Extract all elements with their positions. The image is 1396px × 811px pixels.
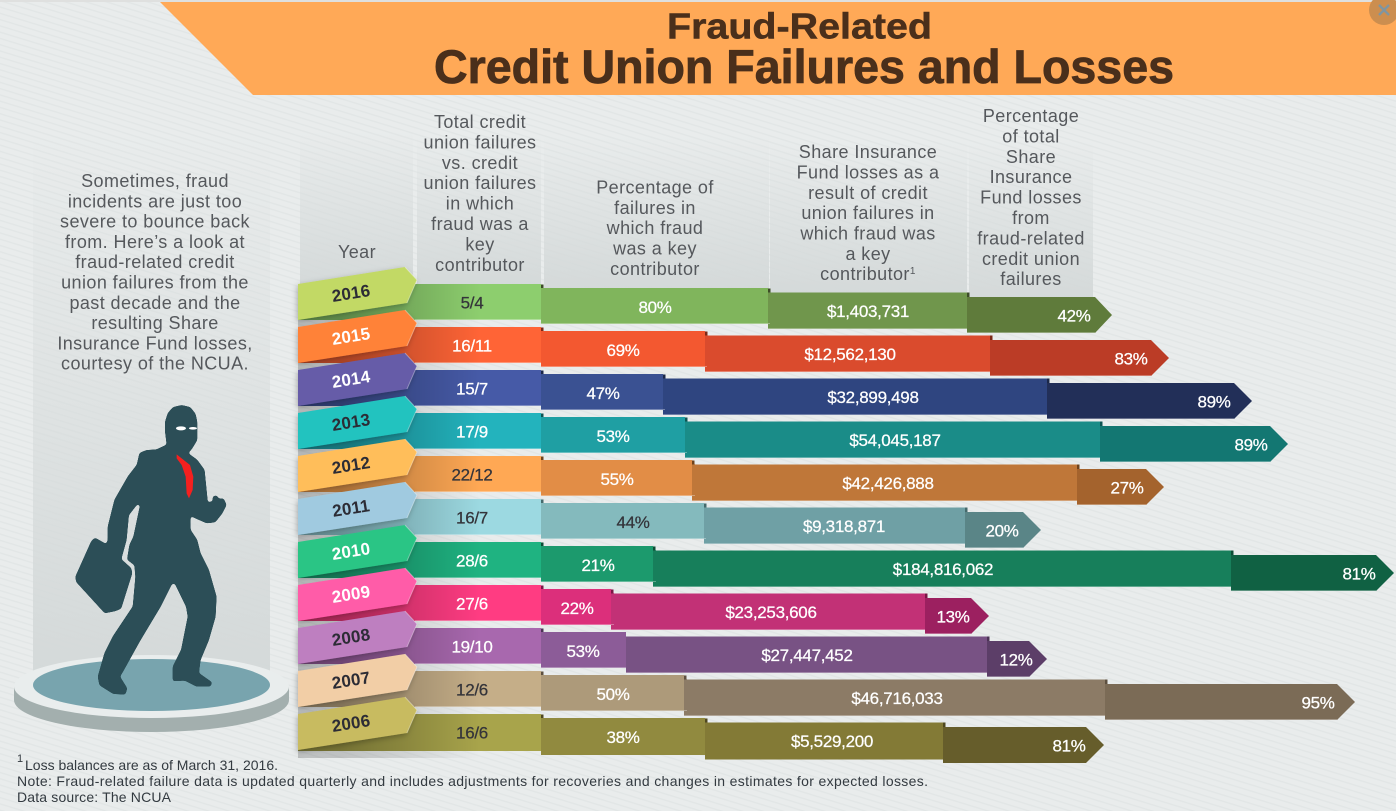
row values: 81% [1342, 564, 1376, 584]
row values: 80% [638, 298, 672, 317]
column heading: percentage of failures: which fraud [606, 218, 703, 238]
row values: $1,403,731 [827, 302, 909, 321]
row values: 89% [1197, 392, 1231, 412]
column heading: fund losses: which fraud was [799, 224, 936, 244]
row values [451, 638, 1033, 670]
column heading: total failures: Total credit [434, 112, 526, 132]
row values [456, 552, 1376, 584]
row values [456, 680, 1335, 712]
column heading: percentage of total losses: Share [1006, 147, 1056, 167]
column heading: fund losses [797, 142, 940, 284]
column heading: fund losses: result of credit [808, 183, 928, 203]
row values [452, 336, 1148, 368]
column heading: total failures: key [465, 234, 495, 254]
year tag [298, 353, 417, 406]
footnotes [17, 753, 928, 805]
column heading: fund losses: Fund losses as a [797, 162, 940, 182]
year tag [298, 611, 417, 664]
row: 2013 [298, 396, 1288, 462]
row values: 5/4 [461, 294, 483, 312]
panel: left column backdrop [33, 130, 270, 685]
row: 2015 [298, 310, 1169, 376]
column heading: fund losses: a key [845, 244, 891, 264]
row values: $5,529,200 [791, 732, 873, 751]
row values: $27,447,452 [761, 646, 853, 665]
intro text block: fraud-related credit [75, 252, 235, 272]
row values: 20% [985, 522, 1019, 540]
year tag: 2007 [331, 668, 372, 693]
row values: 81% [1052, 736, 1086, 756]
title line 1: Fraud-Related [667, 6, 932, 46]
row values: $32,899,498 [827, 388, 919, 407]
row values [456, 422, 1268, 454]
row values: 16/6 [456, 724, 488, 742]
column heading: percentage of total losses: failures [1000, 269, 1062, 289]
footnotes: 1 [17, 753, 23, 765]
row values [456, 594, 970, 626]
row values: 12% [999, 650, 1033, 670]
year tag [298, 396, 417, 449]
intro text block: past decade and the [69, 293, 241, 313]
year tag: 2016 [331, 281, 372, 306]
row values: 89% [1234, 436, 1268, 454]
row values: 83% [1114, 350, 1148, 368]
column heading: percentage of total losses: Percentage [983, 106, 1079, 126]
intro text block: resulting Share [91, 313, 219, 333]
intro text block: from. Here’s a look at [65, 232, 245, 252]
row values: 53% [566, 642, 600, 661]
row: 2009 [298, 568, 989, 634]
row: 2016 [298, 267, 1112, 333]
row: 2011 [298, 482, 1041, 548]
icon: masked fraudster with briefcase [76, 406, 226, 694]
year tag: 2013 [331, 410, 372, 435]
intro text block: Insurance Fund losses, [57, 333, 253, 353]
column heading: percentage of total losses: of total [1002, 126, 1060, 146]
row values: $184,816,062 [893, 560, 993, 579]
row values: 17/9 [456, 422, 488, 442]
intro text block: Sometimes, fraud [81, 171, 229, 191]
year tag [298, 525, 417, 578]
row values: 28/6 [456, 552, 488, 570]
row values [451, 466, 1144, 498]
year tag: 2014 [331, 367, 372, 392]
row values: 42% [1057, 306, 1091, 326]
row values: 13% [936, 608, 970, 626]
year tag [298, 267, 417, 320]
row values: 22/12 [451, 466, 493, 484]
year tag [298, 654, 417, 707]
row values [456, 380, 1231, 412]
intro text block: severe to bounce back [60, 212, 251, 232]
row values: 47% [586, 384, 620, 403]
panel: year column backdrop [300, 130, 413, 290]
column heading: fund losses: 1 [910, 266, 916, 277]
column heading: percentage of failures: contributor [610, 259, 700, 279]
column heading: total failures [424, 112, 536, 275]
row: 2010 [298, 525, 1394, 591]
column heading: fund losses: Share Insurance [799, 142, 937, 162]
row values: 38% [606, 728, 640, 747]
row values: $54,045,187 [849, 431, 941, 450]
row: 2014 [298, 353, 1252, 419]
column heading: percentage of total losses: from [1012, 208, 1050, 228]
row: 2008 [298, 611, 1047, 677]
column heading: percentage of total losses: Fund losses [980, 188, 1082, 208]
panel: fund losses column backdrop [770, 140, 967, 295]
year tag: 2011 [331, 496, 371, 521]
column heading: percentage of total losses: fraud-related [977, 228, 1085, 248]
year tag: 2015 [331, 324, 372, 349]
intro text block [57, 171, 253, 374]
row values: 16/11 [452, 336, 492, 356]
row values [456, 508, 1019, 540]
column heading: total failures: contributor [435, 255, 525, 275]
footnotes: Note: Fraud-related failure data is updated quarterly and includes adjustments for recoveries and changes in estimates for expected losses. [17, 773, 928, 789]
row values: 44% [616, 513, 650, 532]
column heading: percentage of failures: Percentage of [596, 178, 714, 198]
row values: 12/6 [456, 680, 488, 700]
column heading: year: Year [338, 242, 376, 262]
row values: 22% [560, 599, 594, 618]
row values: $12,562,130 [804, 345, 896, 364]
year tag: 2009 [331, 582, 372, 607]
year tag [298, 439, 417, 492]
column heading: total failures: vs. credit [442, 153, 518, 173]
icon: eyes [176, 426, 197, 430]
column heading: fund losses: contributor [820, 264, 910, 284]
column heading: total failures: union failures [424, 132, 536, 152]
icon: red tie [177, 454, 193, 498]
panel: total failures column backdrop [417, 135, 541, 287]
column heading: fund losses: union failures in [801, 203, 935, 223]
row values [461, 294, 1091, 326]
column heading: percentage of total losses [977, 106, 1085, 289]
title banner [160, 2, 1396, 95]
year tag: 2008 [331, 625, 372, 650]
row values: $23,253,606 [725, 603, 817, 622]
row values: $9,318,871 [803, 517, 885, 536]
row values: 21% [581, 556, 615, 575]
row values: 16/7 [456, 508, 488, 528]
row values: 95% [1301, 694, 1335, 712]
row values: 27/6 [456, 594, 488, 614]
row values: 53% [596, 427, 630, 446]
footnotes: Loss balances are as of March 31, 2016. [25, 757, 278, 773]
panel: percentage of failures column backdrop [544, 135, 769, 291]
column heading: percentage of failures: was a key [612, 239, 697, 259]
year tag [298, 697, 417, 750]
year tag [298, 310, 417, 363]
column heading: percentage of failures [596, 178, 714, 279]
column heading: percentage of failures: failures in [614, 198, 696, 218]
column heading: percentage of total losses: credit union [982, 249, 1080, 269]
row values: 69% [606, 341, 640, 360]
year tag [298, 568, 417, 621]
column heading: total failures: in which [446, 194, 514, 214]
row: 2007 [298, 654, 1355, 720]
row values: 27% [1110, 478, 1144, 498]
panel: percentage of losses column backdrop [969, 140, 1093, 300]
year tag: 2006 [331, 711, 372, 736]
row: 2006 [298, 697, 1104, 763]
row: 2012 [298, 439, 1164, 505]
row values: 50% [596, 685, 630, 704]
year tag: 2010 [331, 539, 372, 564]
column heading: percentage of total losses: Insurance [990, 167, 1072, 187]
intro text block: courtesy of the NCUA. [61, 354, 249, 374]
row values: 15/7 [456, 380, 488, 398]
column heading: total failures: fraud was a [431, 214, 529, 234]
intro text block: incidents are just too [68, 191, 242, 211]
title line 2: Credit Union Failures and Losses [434, 40, 1174, 93]
row values: $46,716,033 [851, 689, 943, 708]
row values: 19/10 [451, 638, 493, 656]
footnotes: Data source: The NCUA [17, 789, 172, 805]
row values: $42,426,888 [842, 474, 934, 493]
icon: pedestal [14, 655, 289, 732]
year tag: 2012 [331, 453, 372, 478]
intro text block: union failures from the [61, 272, 249, 292]
row values [456, 724, 1086, 756]
row values: 55% [600, 470, 634, 489]
year tag [298, 482, 417, 535]
column heading: total failures: union failures [424, 173, 536, 193]
icon: close button [1369, 0, 1396, 25]
